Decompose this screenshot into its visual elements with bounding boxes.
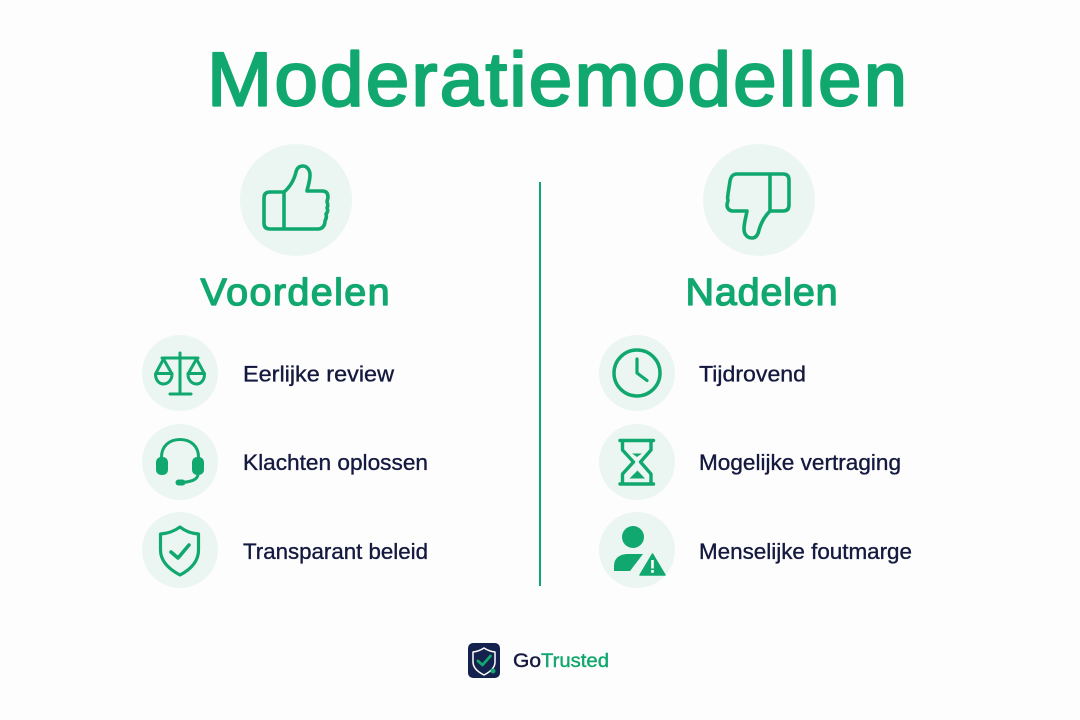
item: Tijdrovend [599,335,806,411]
logo: GoTrusted: Trusted [541,651,609,672]
divider [539,182,541,586]
item: Transparant beleid [142,512,428,588]
item: Menselijke foutmarge: Menselijke foutmarge [699,539,912,564]
panel: voordelen [142,144,428,588]
heading: Voordelen: Voordelen [200,272,391,314]
item: Transparant beleid: Transparant beleid [243,539,428,564]
panel: nadelen [599,144,912,588]
title: Moderatiemodellen [207,38,909,122]
icon: logo shield [468,643,500,678]
logo: GoTrusted: Go [513,651,541,672]
logo: GoTrusted [468,643,609,678]
item: Klachten oplossen [142,424,428,500]
item: Mogelijke vertraging: Mogelijke vertraging [699,450,901,475]
item: Eerlijke review [142,335,394,411]
item: Menselijke foutmarge [599,512,912,588]
item: Tijdrovend: Tijdrovend [699,362,806,386]
icon: thumbs down [703,144,815,256]
icon: thumbs up [240,144,352,256]
heading: Nadelen: Nadelen [686,272,838,314]
item: Eerlijke review: Eerlijke review [243,362,394,386]
item: Klachten oplossen: Klachten oplossen [243,450,428,475]
item: Mogelijke vertraging [599,424,901,500]
